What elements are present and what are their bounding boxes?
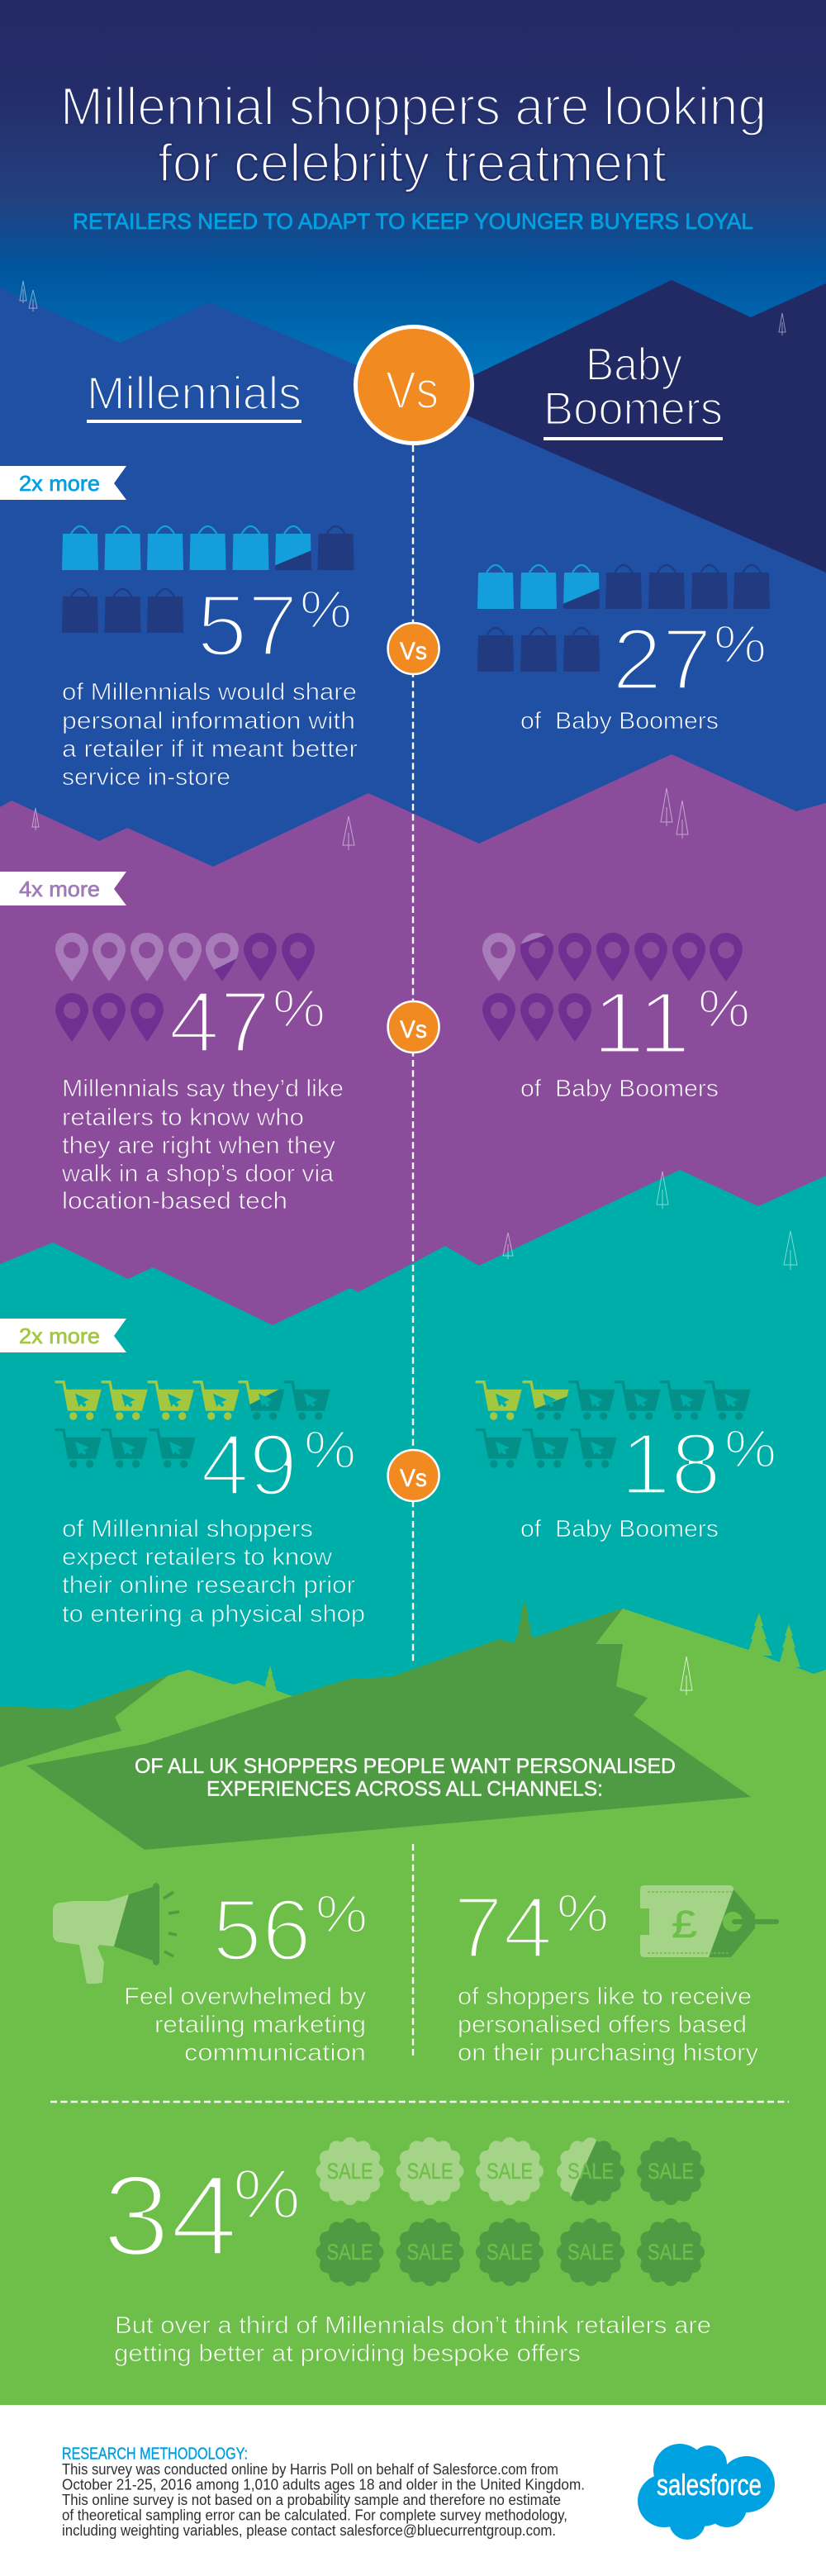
text: shoppers like offers: [458, 1984, 759, 2066]
stat: 56%: 56: [212, 1882, 311, 1980]
background: dark green hillside banner: [26, 1609, 751, 1850]
footer: research methodology: This online survey is not based on a probability sample and therefore no estimate: [62, 2492, 561, 2508]
icon row: sale badges bottom: SALE: [567, 2240, 614, 2265]
stat: 47%: [169, 973, 325, 1071]
icon row: millennial shopping carts: [56, 1382, 330, 1468]
text: millennial location: location-based tech: [62, 1188, 287, 1214]
ribbon: 2x more: 2x more: [19, 471, 100, 496]
text: of Baby Boomers: of Baby Boomers: [520, 1516, 719, 1542]
stat: 49%: 49: [201, 1416, 297, 1514]
icon: megaphone: [53, 1883, 179, 1984]
stat: 18%: %: [724, 1419, 776, 1479]
icon row: millennial shopping bags: [62, 526, 354, 633]
footer: research methodology: [62, 2445, 585, 2539]
stat: 27%: 27: [612, 611, 712, 709]
stat: 49%: %: [304, 1419, 356, 1479]
text: over a third of millennials: But over a third of Millennials don’t think retailers are: [115, 2312, 711, 2339]
stat: 74%: %: [557, 1884, 609, 1943]
icon row: sale badges top: SALE: [406, 2159, 453, 2184]
text: millennial personal information: a retailer if it meant better: [62, 736, 358, 763]
ribbon: 4x more: [0, 872, 126, 905]
stat: 57%: [197, 577, 352, 674]
panel: personalised offers: [453, 1879, 779, 2066]
text: millennial personal information: of Millennials would share: [62, 679, 357, 706]
badge: Vs: [388, 623, 439, 674]
title: [60, 76, 767, 193]
icon row: sale badges bottom: SALE: [327, 2240, 373, 2265]
ribbon: 2x more: [0, 466, 126, 500]
section heading: personalised experiences: EXPERIENCES ACROSS ALL CHANNELS:: [206, 1778, 603, 1801]
icon: price tag coupon: £: [672, 1903, 697, 1946]
text: shoppers like offers: on their purchasing history: [458, 2040, 759, 2066]
text: millennial personal information: [62, 679, 358, 791]
badge: large Vs: [355, 327, 472, 443]
panel: bespoke offers: [102, 2137, 711, 2367]
panel: online research: [0, 1319, 776, 1628]
background: trees on the blue and purple ridges: [20, 281, 797, 1270]
text: over a third of millennials: [114, 2312, 711, 2367]
badge: Vs: Vs: [400, 638, 427, 665]
text: millennial location: retailers to know who: [62, 1105, 304, 1131]
stat: 27%: %: [714, 615, 767, 674]
icon row: sale badges top: SALE: [487, 2159, 533, 2184]
icon row: baby boomer shopping bags: [477, 565, 770, 672]
stat: 27%: [612, 611, 767, 709]
panel: location-based tech: [0, 872, 750, 1214]
background: teal section: [0, 1170, 826, 1776]
badge: Vs: [388, 1450, 439, 1501]
text: shoppers like offers: of shoppers like to receive: [458, 1984, 752, 2010]
panel: marketing communication: [53, 1882, 368, 2066]
centre dashed divider: [412, 445, 414, 2059]
ribbon: 4x more: 4x more: [19, 877, 100, 901]
icon row: baby boomer location pins: [482, 933, 743, 1042]
section heading: personalised experiences: OF ALL UK SHOPPERS PEOPLE WANT PERSONALISED: [135, 1755, 676, 1778]
text: millennial location: [61, 1076, 344, 1214]
heading: Baby Boomers: [544, 338, 723, 440]
stat: 56%: %: [316, 1884, 368, 1943]
background: blue mountains and section: [0, 288, 826, 909]
stat: 56%: [212, 1882, 368, 1980]
text: millennial online research: [62, 1516, 365, 1628]
horizontal dashed divider: [50, 2101, 789, 2103]
icon row: millennial location pins: [55, 933, 315, 1042]
text: millennial online research: expect retailers to know: [62, 1544, 333, 1571]
text: millennial online research: to entering a physical shop: [62, 1601, 365, 1628]
icon: light green pine trees: [263, 1613, 800, 1691]
text: of Baby Boomers: of Baby Boomers: [520, 1076, 719, 1102]
title: for celebrity treatment: [158, 132, 667, 193]
background: dark green left slope: [0, 1675, 169, 1767]
stat: 74%: 74: [453, 1879, 553, 1976]
stat: 11%: %: [698, 978, 750, 1038]
heading: Baby Boomers: Baby: [586, 338, 682, 390]
footer: research methodology: October 21-25, 2016 among 1,010 adults ages 18 and older in the United Kingdom.: [62, 2477, 585, 2493]
text: millennial personal information: personal information with: [62, 708, 355, 734]
heading: Baby Boomers: Boomers: [544, 382, 723, 435]
badge: Vs: [388, 1001, 439, 1053]
icon: outline tree on green hill: [681, 1656, 692, 1695]
icon: price tag coupon: [640, 1885, 779, 1957]
background: white footer: [0, 2405, 826, 2576]
heading: Millennials: Millennials: [87, 367, 301, 419]
subtitle: RETAILERS NEED TO ADAPT TO KEEP YOUNGER BUYERS LOYAL: [73, 209, 753, 234]
stat: 57%: 57: [197, 577, 298, 674]
badge: Vs: Vs: [400, 1465, 427, 1492]
text: millennial online research: of Millennial shoppers: [62, 1516, 313, 1542]
text: millennial location: walk in a shop’s door via: [61, 1161, 335, 1187]
stat: 18%: [620, 1416, 776, 1514]
stat: 47%: 47: [169, 973, 271, 1071]
text: millennial location: they are right when they: [62, 1133, 336, 1159]
panel: share personal information: [0, 466, 770, 791]
stat: 34%: [102, 2151, 301, 2280]
footer: research methodology: RESEARCH METHODOLOGY:: [62, 2445, 248, 2464]
text: over a third of millennials: getting better at providing bespoke offers: [114, 2341, 581, 2367]
text: of Baby Boomers: of Baby Boomers: [520, 708, 719, 734]
text: millennial personal information: service in-store: [62, 764, 230, 791]
icon row: sale badges bottom: [316, 2218, 705, 2286]
icon: dark green pine tree: [513, 1600, 536, 1646]
badge: large Vs: Vs: [386, 360, 439, 420]
logo: salesforce cloud: [638, 2444, 775, 2540]
stat: 49%: [201, 1416, 356, 1514]
section heading: personalised experiences: [135, 1755, 676, 1801]
stat: 18%: 18: [620, 1416, 721, 1514]
text: feel overwhelmed: [124, 1984, 367, 2066]
icon row: baby boomer shopping carts: [477, 1382, 751, 1468]
stat: 57%: %: [300, 580, 352, 639]
text: feel overwhelmed: Feel overwhelmed by: [124, 1984, 367, 2010]
icon row: sale badges top: SALE: [648, 2159, 694, 2184]
background: night sky gradient: [0, 0, 826, 496]
icon row: sale badges bottom: SALE: [406, 2240, 453, 2265]
text: shoppers like offers: personalised offers based: [458, 2012, 747, 2038]
footer: research methodology: of theoretical sampling error can be calculated. For complete survey methodology,: [62, 2507, 567, 2523]
ribbon: 2x more: [0, 1319, 126, 1352]
footer: research methodology: This survey was conducted online by Harris Poll on behalf of Salesforce.com from: [62, 2461, 558, 2478]
text: feel overwhelmed: communication: [184, 2040, 366, 2066]
icon row: sale badges top: [316, 2137, 705, 2205]
stat: 34%: %: [233, 2155, 301, 2232]
title: Millennial shoppers are looking: [60, 76, 767, 136]
footer: research methodology: including weighting variables, please contact salesforce@bluecurrentgroup.com.: [62, 2522, 556, 2539]
background: purple section: [0, 754, 826, 1404]
background: dark navy mountain: [413, 280, 826, 573]
icon row: sale badges top: SALE: [567, 2159, 614, 2184]
logo: salesforce cloud: salesforce: [657, 2468, 762, 2502]
text: feel overwhelmed: retailing marketing: [154, 2012, 366, 2038]
text: millennial online research: their online research prior: [62, 1572, 355, 1599]
icon row: sale badges bottom: SALE: [487, 2240, 533, 2265]
icon row: sale badges top: SALE: [327, 2159, 373, 2184]
stat: 11%: 11: [592, 975, 691, 1072]
stat: 47%: %: [273, 978, 325, 1038]
stat: 34%: 34: [102, 2151, 238, 2280]
stat: 74%: [453, 1879, 609, 1976]
text: millennial location: Millennials say they’d like: [62, 1076, 344, 1102]
background: light green hills: [0, 1609, 826, 2412]
badge: Vs: Vs: [400, 1016, 427, 1043]
stat: 11%: [592, 975, 750, 1072]
ribbon: 2x more: 2x more: [19, 1324, 100, 1348]
icon row: sale badges bottom: SALE: [648, 2240, 694, 2265]
